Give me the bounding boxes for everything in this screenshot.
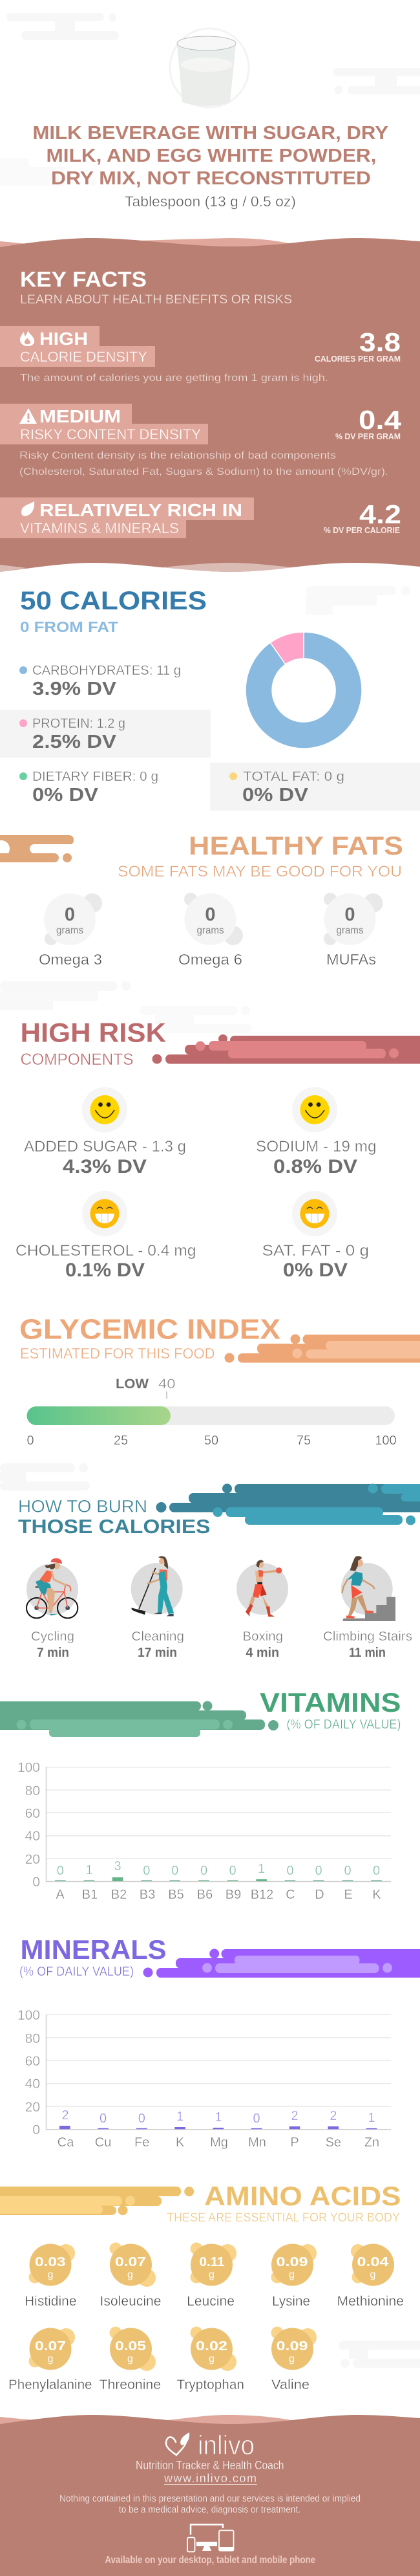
bar chart: minerals: 40 bbox=[25, 2077, 40, 2091]
amino: phenylalanine bbox=[8, 2328, 92, 2392]
heading: vitamins: (% OF DAILY VALUE) bbox=[287, 1718, 401, 1732]
bar chart: minerals: 2 bbox=[291, 2109, 299, 2123]
fact: calorie density: The amount of calories you are getting from 1 gram is high. bbox=[20, 373, 328, 384]
icon: flame bbox=[20, 330, 34, 346]
activity: cleaning bbox=[131, 1556, 184, 1660]
panel: healthy fats bbox=[0, 832, 403, 968]
fact: calorie density: CALORIES PER GRAM bbox=[315, 354, 401, 364]
logo: inlivo bbox=[166, 2430, 255, 2460]
amino: phenylalanine: Phenylalanine bbox=[8, 2377, 92, 2392]
amino: phenylalanine: 0.07 bbox=[35, 2339, 66, 2353]
amino: valine: Valine bbox=[271, 2377, 310, 2392]
amino: lysine: g bbox=[289, 2269, 295, 2280]
fact: risky content density: (Cholesterol, Saturated Fat, Sugars & Sodium) to the amount (%DV/gr). bbox=[19, 466, 388, 477]
stat: omega 3: grams bbox=[56, 925, 83, 936]
panel: key facts bbox=[0, 238, 420, 572]
bar chart: vitamins: B3 bbox=[140, 1888, 155, 1902]
bar chart: minerals: Mg bbox=[210, 2135, 228, 2150]
heading: calories: 50 CALORIES bbox=[20, 587, 207, 615]
item: added sugar: ADDED SUGAR - 1.3 g bbox=[24, 1138, 186, 1155]
bar chart: minerals: Fe bbox=[134, 2135, 149, 2150]
amino: lysine bbox=[271, 2243, 317, 2309]
amino: histidine: Histidine bbox=[25, 2294, 76, 2309]
icon: glass of milk bbox=[170, 28, 249, 107]
amino: isoleucine: g bbox=[127, 2269, 133, 2280]
decoration: orange stripes bbox=[225, 1334, 420, 1362]
bar chart: minerals: 0 bbox=[32, 2123, 40, 2137]
amino: methionine: Methionine bbox=[337, 2294, 404, 2309]
heading: how to burn: HOW TO BURN bbox=[18, 1497, 147, 1516]
activity: cycling: 7 min bbox=[37, 1646, 69, 1660]
legend: dietary fiber bbox=[19, 769, 158, 805]
highlight rows bbox=[0, 710, 420, 811]
activity: climbing stairs bbox=[323, 1556, 412, 1660]
stat: omega 3: Omega 3 bbox=[39, 951, 102, 968]
bar chart: minerals: 1 bbox=[215, 2110, 222, 2124]
activity: boxing: Boxing bbox=[243, 1630, 283, 1644]
bar chart: vitamins: 0 bbox=[57, 1864, 64, 1878]
amino: valine: 0.09 bbox=[277, 2339, 308, 2353]
heading: minerals: (% OF DAILY VALUE) bbox=[19, 1965, 134, 1979]
bar chart: vitamins: 0 bbox=[200, 1864, 207, 1878]
panel: calories and macronutrients bbox=[0, 587, 420, 811]
item: cholesterol bbox=[16, 1191, 196, 1281]
legend: total fat: 0% DV bbox=[242, 785, 309, 805]
gauge label: low 40: LOW bbox=[116, 1377, 149, 1392]
bar chart: minerals: 1 bbox=[368, 2111, 375, 2125]
bar chart: vitamins: D bbox=[315, 1888, 324, 1902]
bar chart: vitamins: B6 bbox=[197, 1888, 213, 1902]
bar chart: minerals: 60 bbox=[25, 2054, 40, 2069]
bar chart: minerals: 80 bbox=[25, 2031, 40, 2046]
fact: vitamins and minerals: VITAMINS & MINERALS bbox=[20, 520, 179, 536]
stat: MUFAs: grams bbox=[336, 925, 363, 936]
amino: threonine: g bbox=[127, 2353, 133, 2364]
gauge scale: 100 bbox=[375, 1434, 397, 1448]
stat: omega 3: 0 bbox=[65, 904, 75, 925]
fact: risky content density: % DV PER GRAM bbox=[335, 431, 401, 441]
heading: vitamins: VITAMINS bbox=[260, 1687, 401, 1718]
heading: healthy fats: SOME FATS MAY BE GOOD FOR YOU bbox=[118, 863, 402, 880]
bar chart: vitamins: 60 bbox=[25, 1806, 40, 1821]
bar chart: minerals: 0 bbox=[253, 2112, 260, 2126]
legend: protein: 2.5% DV bbox=[32, 732, 117, 752]
amino: leucine: 0.11 bbox=[199, 2255, 225, 2269]
heading: calories: 0 FROM FAT bbox=[20, 618, 118, 635]
icon: leaf bbox=[21, 501, 34, 516]
gauge bar bbox=[27, 1406, 395, 1425]
activity: boxing bbox=[236, 1560, 288, 1660]
bar chart: vitamins: 1 bbox=[258, 1862, 265, 1876]
fact: vitamins and minerals: RELATIVELY RICH IN bbox=[39, 500, 242, 520]
bar chart: minerals: P bbox=[290, 2135, 299, 2150]
bar chart: minerals: 1 bbox=[176, 2110, 184, 2124]
title: MILK BEVERAGE WITH SUGAR, DRY bbox=[32, 123, 388, 144]
amino: tryptophan bbox=[177, 2326, 244, 2392]
item: added sugar bbox=[24, 1087, 186, 1177]
decoration: red stripes bbox=[152, 1034, 420, 1064]
icon: person sweeping bbox=[131, 1556, 183, 1616]
panel: footer bbox=[0, 2415, 420, 2576]
icon: warning triangle bbox=[19, 408, 37, 424]
gauge scale: 75 bbox=[297, 1434, 311, 1448]
heading: how to burn: THOSE CALORIES bbox=[18, 1515, 211, 1538]
gauge scale bbox=[26, 1434, 397, 1448]
decoration: orange stripes bbox=[0, 835, 81, 862]
heading: healthy fats bbox=[118, 832, 403, 880]
amino: threonine: 0.05 bbox=[115, 2339, 146, 2353]
heading: key facts: KEY FACTS bbox=[20, 268, 147, 292]
activity: cycling bbox=[26, 1558, 78, 1660]
legend: dietary fiber: 0% DV bbox=[32, 785, 99, 805]
amino: isoleucine: Isoleucine bbox=[100, 2294, 162, 2309]
heading: amino acids bbox=[167, 2181, 401, 2225]
amino: isoleucine: 0.07 bbox=[115, 2255, 146, 2269]
amino: tryptophan: g bbox=[209, 2353, 215, 2364]
gauge scale: 50 bbox=[204, 1434, 218, 1448]
bar chart: minerals: 2 bbox=[61, 2108, 69, 2123]
heading: glycemic index: GLYCEMIC INDEX bbox=[19, 1313, 280, 1346]
amino: lysine: 0.09 bbox=[277, 2255, 308, 2269]
bar chart: minerals: 20 bbox=[25, 2100, 40, 2115]
bar chart: vitamins: 40 bbox=[25, 1829, 40, 1844]
availability note: Available on your desktop, tablet and mobile phone bbox=[105, 2555, 315, 2566]
fact: calorie density bbox=[0, 326, 401, 384]
amino: lysine: Lysine bbox=[272, 2294, 310, 2309]
item: sodium: SODIUM - 19 mg bbox=[256, 1138, 376, 1155]
bar chart: vitamins: 0 bbox=[315, 1864, 322, 1878]
bar chart: vitamins: 100 bbox=[17, 1760, 40, 1775]
logo: inlivo: inlivo bbox=[198, 2430, 255, 2460]
heading: glycemic index bbox=[19, 1313, 280, 1362]
amino: phenylalanine: g bbox=[48, 2353, 53, 2364]
bar chart: minerals: Mn bbox=[248, 2135, 266, 2150]
bar chart: vitamins: 1 bbox=[85, 1863, 93, 1877]
bar chart: vitamins: 0 bbox=[286, 1864, 294, 1878]
gauge scale: 25 bbox=[114, 1434, 128, 1448]
icon: grinning emoji bbox=[300, 1199, 330, 1228]
amino: threonine bbox=[100, 2326, 161, 2392]
bar chart: vitamins: B12 bbox=[251, 1888, 273, 1902]
bar chart: vitamins: 80 bbox=[25, 1784, 40, 1798]
donut chart bbox=[246, 632, 362, 748]
disclaimer: Nothing contained in this presentation and our services is intended or implied bbox=[59, 2493, 361, 2504]
header: food image and title bbox=[32, 28, 388, 210]
amino: threonine: Threonine bbox=[100, 2377, 161, 2392]
disclaimer: to be a medical advice, diagnosis or treatment. bbox=[119, 2504, 300, 2515]
panel: glycemic index bbox=[19, 1313, 420, 1448]
heading: minerals bbox=[19, 1934, 167, 1979]
icon: grinning emoji bbox=[90, 1199, 119, 1228]
legend: protein bbox=[19, 716, 125, 752]
gauge label: low 40 bbox=[116, 1377, 176, 1399]
bar chart: vitamins: 0 bbox=[143, 1864, 150, 1878]
serving size: Tablespoon (13 g / 0.5 oz) bbox=[125, 193, 296, 210]
amino: leucine bbox=[187, 2242, 236, 2309]
heading: high risk bbox=[21, 1017, 166, 1069]
bar chart: minerals: Zn bbox=[364, 2135, 379, 2150]
fact: risky content density: RISKY CONTENT DENSITY bbox=[20, 426, 201, 442]
fact: risky content density: Risky Content density is the relationship of bad components bbox=[19, 450, 336, 461]
item: saturated fat: 0% DV bbox=[283, 1260, 348, 1281]
activity: climbing stairs: 11 min bbox=[349, 1646, 386, 1660]
bar chart: vitamins: 0 bbox=[344, 1864, 352, 1878]
legend: total fat bbox=[229, 769, 344, 805]
amino: leucine: g bbox=[209, 2269, 215, 2280]
fact: risky content density: 0.4 bbox=[359, 405, 401, 435]
decoration: purple stripes bbox=[143, 1948, 420, 1978]
amino: valine: g bbox=[289, 2353, 295, 2364]
decoration: teal stripes bbox=[156, 1484, 420, 1525]
fact: risky content density bbox=[0, 404, 401, 477]
decoration: green stripes bbox=[0, 1701, 278, 1737]
legend: dietary fiber: DIETARY FIBER: 0 g bbox=[32, 769, 158, 784]
legend: carbohydrates: CARBOHYDRATES: 11 g bbox=[32, 663, 181, 678]
icon: smiling emoji bbox=[300, 1095, 330, 1124]
legend: carbohydrates bbox=[19, 663, 181, 699]
title: MILK, AND EGG WHITE POWDER, bbox=[47, 146, 376, 166]
bar chart: minerals: 2 bbox=[330, 2109, 337, 2123]
heading: key facts bbox=[20, 268, 292, 307]
bar chart: minerals: 100 bbox=[17, 2008, 40, 2023]
icon: heart with leaf bbox=[166, 2432, 189, 2455]
bar chart: vitamins: K bbox=[372, 1888, 381, 1902]
amino: methionine bbox=[337, 2243, 404, 2309]
fact: vitamins and minerals bbox=[0, 497, 401, 538]
decoration: yellow stripes bbox=[0, 2187, 194, 2215]
stat: MUFAs bbox=[324, 893, 383, 968]
heading: glycemic index: ESTIMATED FOR THIS FOOD bbox=[20, 1345, 215, 1362]
amino: tryptophan: 0.02 bbox=[196, 2339, 227, 2353]
item: sodium bbox=[256, 1087, 376, 1177]
bar chart: minerals: 0 bbox=[138, 2112, 145, 2126]
amino: methionine: g bbox=[370, 2269, 375, 2280]
panel: minerals bbox=[17, 1934, 420, 2150]
bar chart: vitamins: 0 bbox=[32, 1875, 40, 1890]
bar chart: minerals: 0 bbox=[100, 2112, 107, 2126]
title: DRY MIX, NOT RECONSTITUTED bbox=[51, 168, 371, 189]
icon: cyclist bbox=[26, 1558, 78, 1618]
amino: histidine: 0.03 bbox=[35, 2255, 66, 2269]
heading: high risk: HIGH RISK bbox=[21, 1017, 166, 1048]
stat: omega 6: 0 bbox=[205, 904, 216, 925]
bar chart: vitamins: 0 bbox=[171, 1864, 178, 1878]
icon: smiling emoji bbox=[90, 1095, 119, 1124]
tagline and link: www.inlivo.com bbox=[163, 2472, 257, 2485]
amino: tryptophan: Tryptophan bbox=[177, 2377, 244, 2392]
heading: vitamins bbox=[260, 1687, 401, 1732]
bar chart: minerals: K bbox=[176, 2135, 185, 2150]
amino: isoleucine bbox=[100, 2242, 162, 2309]
bar chart: minerals: Se bbox=[326, 2135, 341, 2150]
activity: climbing stairs: Climbing Stairs bbox=[323, 1630, 412, 1644]
amino: histidine bbox=[25, 2243, 76, 2309]
bar chart: minerals: Ca bbox=[58, 2135, 74, 2150]
item: cholesterol: 0.1% DV bbox=[65, 1260, 145, 1281]
panel: high risk components bbox=[16, 1017, 420, 1281]
disclaimer bbox=[59, 2493, 361, 2515]
icon: boxer bbox=[236, 1560, 288, 1617]
bar chart: vitamins: C bbox=[286, 1888, 295, 1902]
bar chart: minerals: Cu bbox=[95, 2135, 111, 2150]
amino: valine bbox=[271, 2326, 317, 2392]
title bbox=[32, 123, 388, 189]
heading: minerals: MINERALS bbox=[21, 1934, 167, 1965]
heading: how to burn bbox=[18, 1497, 211, 1538]
item: saturated fat bbox=[262, 1191, 369, 1281]
panel: vitamins bbox=[0, 1687, 401, 1902]
legend: total fat: TOTAL FAT: 0 g bbox=[243, 769, 344, 784]
fact: calorie density: 3.8 bbox=[359, 327, 401, 357]
heading: high risk: COMPONENTS bbox=[21, 1051, 133, 1069]
bar chart: minerals bbox=[17, 2008, 391, 2150]
gauge scale: 0 bbox=[26, 1434, 34, 1448]
heading: key facts: LEARN ABOUT HEALTH BENEFITS OR RISKS bbox=[20, 292, 292, 307]
activity: cleaning: 17 min bbox=[138, 1646, 177, 1660]
bar chart: vitamins: 20 bbox=[25, 1852, 40, 1867]
amino: leucine: Leucine bbox=[187, 2294, 235, 2309]
amino: histidine: g bbox=[48, 2269, 53, 2280]
bar chart: vitamins: 0 bbox=[229, 1864, 236, 1878]
bar chart: vitamins: B5 bbox=[168, 1888, 184, 1902]
activity: cycling: Cycling bbox=[31, 1630, 74, 1644]
fact: calorie density: CALORIE DENSITY bbox=[20, 349, 147, 365]
amino: methionine: 0.04 bbox=[357, 2255, 390, 2269]
item: sodium: 0.8% DV bbox=[273, 1156, 357, 1177]
activity: boxing: 4 min bbox=[246, 1646, 279, 1660]
panel: how to burn those calories bbox=[18, 1484, 420, 1660]
bar chart: vitamins: E bbox=[344, 1888, 353, 1902]
icon: devices bbox=[187, 2524, 234, 2551]
fact: vitamins and minerals: % DV PER CALORIE bbox=[324, 525, 400, 535]
bar chart: vitamins: B2 bbox=[111, 1888, 127, 1902]
heading: amino acids: AMINO ACIDS bbox=[204, 2181, 401, 2211]
stat: omega 6 bbox=[178, 893, 243, 968]
bar chart: vitamins: B1 bbox=[82, 1888, 98, 1902]
stat: omega 6: Omega 6 bbox=[178, 951, 242, 968]
fact: risky content density: MEDIUM bbox=[39, 406, 121, 426]
tagline and link: Nutrition Tracker & Health Coach bbox=[136, 2459, 284, 2472]
fact: calorie density: HIGH bbox=[39, 329, 88, 349]
heading: healthy fats: HEALTHY FATS bbox=[189, 832, 403, 860]
bar chart: vitamins bbox=[17, 1760, 391, 1902]
stat: omega 3 bbox=[39, 893, 102, 968]
bar chart: vitamins: 0 bbox=[373, 1864, 380, 1878]
heading: amino acids: THESE ARE ESSENTIAL FOR YOUR BODY bbox=[167, 2211, 400, 2225]
tagline and link bbox=[136, 2459, 284, 2485]
legend: protein: PROTEIN: 1.2 g bbox=[32, 716, 125, 731]
fact: vitamins and minerals: 4.2 bbox=[359, 499, 401, 529]
stat: MUFAs: 0 bbox=[344, 904, 355, 925]
bar chart: vitamins: 3 bbox=[114, 1859, 121, 1873]
legend: carbohydrates: 3.9% DV bbox=[32, 679, 117, 699]
gauge label: low 40: 40 bbox=[158, 1377, 176, 1392]
icon: person on stairs bbox=[341, 1556, 395, 1621]
stat: omega 6: grams bbox=[196, 925, 224, 936]
item: added sugar: 4.3% DV bbox=[63, 1156, 147, 1177]
item: saturated fat: SAT. FAT - 0 g bbox=[262, 1242, 369, 1260]
bar chart: vitamins: B9 bbox=[226, 1888, 241, 1902]
item: cholesterol: CHOLESTEROL - 0.4 mg bbox=[16, 1242, 196, 1260]
bar chart: vitamins: A bbox=[56, 1888, 65, 1902]
panel: amino acids bbox=[0, 2181, 404, 2392]
heading: calories bbox=[20, 587, 207, 635]
activity: cleaning: Cleaning bbox=[132, 1630, 184, 1644]
stat: MUFAs: MUFAs bbox=[326, 951, 376, 968]
